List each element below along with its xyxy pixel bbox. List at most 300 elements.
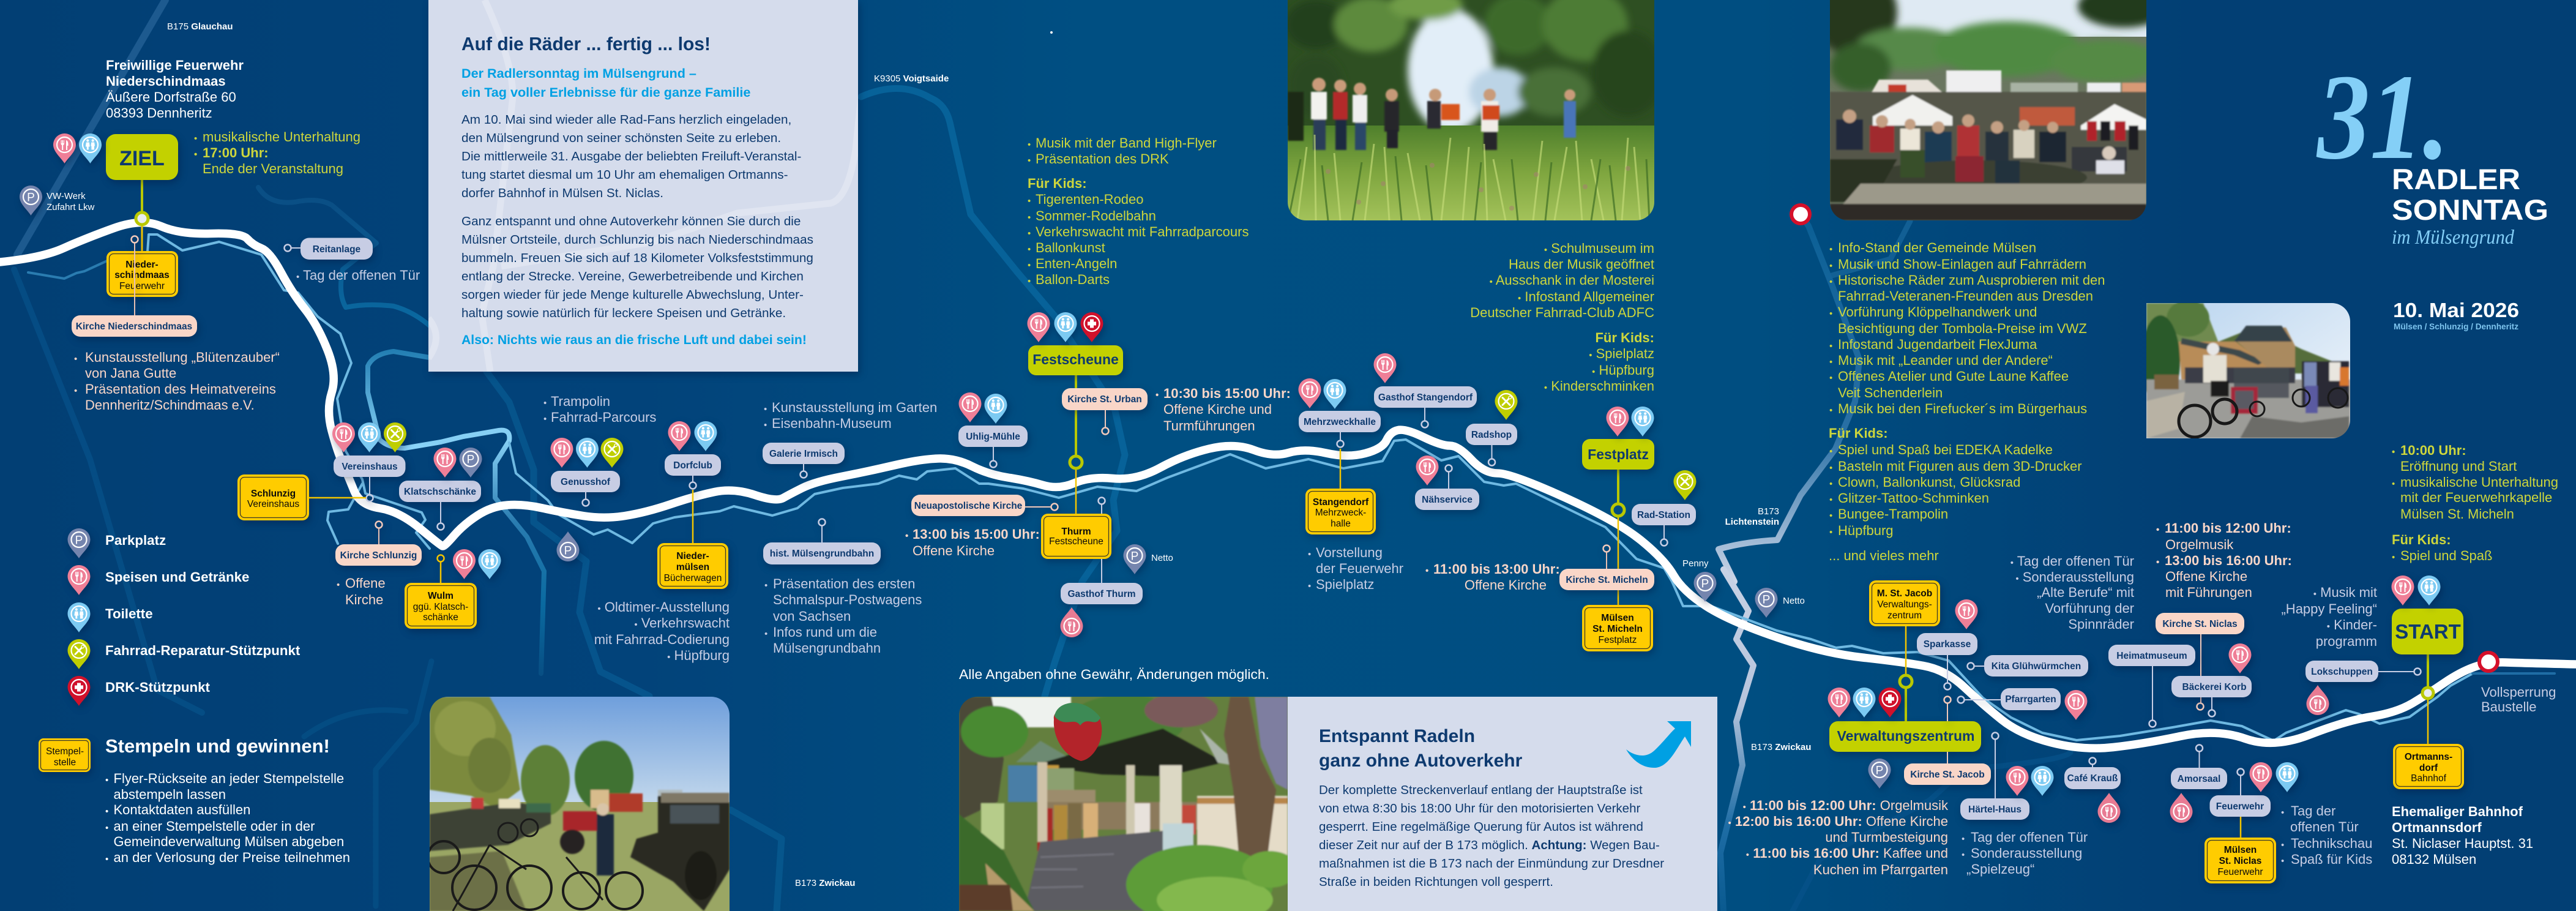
text: Verwaltungszentrum programme: Basteln mit Figuren aus dem 3D-Drucker xyxy=(1838,459,2082,474)
text: Kirche St. Niclas programme: 11:00 bis 12:00 Uhr: xyxy=(2165,520,2291,536)
text: road closure: Vollsperrung xyxy=(2481,684,2556,700)
background road network xyxy=(14,0,2070,911)
photo: festival crowd xyxy=(1830,0,2146,220)
sign: Thurm xyxy=(1041,497,1111,583)
text: Feuerwehr programme xyxy=(2281,803,2372,867)
text: Festscheune programme: Verkehrswacht mit Fahrradparcours xyxy=(1036,224,1249,239)
pins: Mehrzweckhalle xyxy=(1299,378,1346,409)
label: Pfarrgarten: Pfarrgarten xyxy=(2005,694,2056,705)
label: Härtel-Haus: Härtel-Haus xyxy=(1968,804,2022,815)
text: VW-Werk access: Zufahrt Lkw xyxy=(47,202,95,212)
station: Verwaltungszentrum xyxy=(1827,626,1981,752)
text: Kirche St. Niclas programme: • xyxy=(2156,557,2159,568)
sign: Wulm: ggü. Klatsch- xyxy=(413,602,468,612)
text: Kirche St. Micheln programme: 11:00 bis 13:00 Uhr: xyxy=(1433,561,1560,577)
road labels: B173 Zwickau xyxy=(1751,742,1811,752)
text: Festscheune programme: Für Kids: xyxy=(1028,176,1087,191)
text: Stempeln instructions: • xyxy=(105,823,108,833)
text: Neuapostolische Kirche programme: 13:00 bis 15:00 Uhr: xyxy=(913,527,1040,542)
text: Verwaltungszentrum programme: • xyxy=(1829,405,1832,416)
text: START programme: Spiel und Spaß xyxy=(2400,548,2492,563)
text: Reitanlage programme: Tag der offenen Tür xyxy=(303,268,420,283)
icon: food pin Sparkasse xyxy=(1955,599,1978,629)
text: Verwaltungszentrum programme: • xyxy=(1829,373,1832,383)
sign: Thurm: Festscheune xyxy=(1049,536,1103,547)
text: Kirche Schlunzig programme: • xyxy=(337,580,340,590)
label: Bäckerei Korb xyxy=(2171,676,2252,716)
sign: Stangendorf: halle xyxy=(1331,519,1351,529)
pins: Dorfclub xyxy=(668,421,717,451)
text: Galerie Irmisch programme: Eisenbahn-Museum xyxy=(772,416,892,431)
text: Festplatz programme: • Kinderschminken xyxy=(1544,378,1654,394)
sign: Niederschindmaas: Nieder- xyxy=(125,260,159,270)
text: ZIEL programme: • xyxy=(194,149,197,160)
text: Niedermülsen programme: • Hüpfburg xyxy=(667,648,730,663)
text: Feuerwehr programme: Tag der xyxy=(2291,803,2335,819)
text: Niedermülsen programme xyxy=(594,599,730,663)
label: Genusshof xyxy=(551,471,620,506)
text: Lokschuppen programme: „Happy Feeling“ xyxy=(2281,601,2377,617)
sign: Mülsen St. Niclas: St. Niclas xyxy=(2219,856,2261,866)
text: Festplatz programme: Haus der Musik geöffnet xyxy=(1509,257,1654,272)
label: Härtel-Haus xyxy=(1960,732,2029,820)
text: Kirche St. Urban programme xyxy=(1155,386,1291,433)
icon: parking pin Verwaltungszentrum xyxy=(1868,759,1891,789)
text: Verwaltungszentrum programme: ... und vieles mehr xyxy=(1829,548,1939,563)
sign: Ortmannsdorf: Ortmanns- xyxy=(2405,752,2452,762)
sign: Stempelstelle: stelle xyxy=(54,757,76,768)
sign: Niederschindmaas: Feuerwehr xyxy=(119,281,165,291)
label: Radshop: Radshop xyxy=(1471,430,1512,440)
heading: ganz ohne Autoverkehr xyxy=(1319,751,1523,771)
text: Feuerwehr programme: Spaß für Kids xyxy=(2291,852,2372,867)
address: Ehemaliger Bahnhof xyxy=(2392,804,2533,867)
text: Verwaltungszentrum programme: Glitzer-Tattoo-Schminken xyxy=(1838,490,1989,506)
text: Festscheune programme: • xyxy=(1028,212,1031,223)
text: Neuapostolische Kirche programme: • xyxy=(905,531,908,541)
legend: Toilette: Toilette xyxy=(105,606,153,621)
label: Kirche St. Micheln: Kirche St. Micheln xyxy=(1566,575,1648,585)
text: Verwaltungszentrum programme: Vorführung Klöppelhandwerk und xyxy=(1838,304,2037,320)
text: Härtel-Haus programme: Sonderausstellung xyxy=(1971,845,2082,861)
pins: Klatschschänke xyxy=(433,448,482,478)
icon: parking pin Netto 2 xyxy=(1755,588,1777,618)
text: Neuapostolische Kirche programme: Offene Kirche xyxy=(913,543,995,558)
station: Festscheune: Festscheune xyxy=(1032,351,1119,367)
text: Verwaltungszentrum programme: • xyxy=(1829,527,1832,538)
text: Verwaltungszentrum programme xyxy=(1829,240,2105,563)
sign: Stangendorf: Stangendorf xyxy=(1313,497,1369,508)
text: Neuapostolische Kirche programme xyxy=(905,527,1040,558)
icon: food pin Amorsaal xyxy=(2170,793,2192,823)
text: Kirche Niederschindmaas programme: Dennheritz/Schindmaas e.V. xyxy=(85,397,255,413)
icon: food pin Nähservice xyxy=(1416,455,1438,485)
sign: Schlunzig: Vereinshaus xyxy=(247,499,299,509)
title: 31. Radler Sonntag: im Mülsengrund xyxy=(2392,227,2514,249)
pins: Feuerwehr xyxy=(2250,762,2299,792)
label: hist. Mülsengrundbahn: hist. Mülsengrundbahn xyxy=(770,549,874,559)
icon: arrow xyxy=(1626,721,1691,768)
text: Lokschuppen programme: • Musik mit xyxy=(2313,585,2377,600)
text: Kirche Schlunzig programme: Offene xyxy=(345,575,386,591)
title: 31. Radler Sonntag: SONNTAG xyxy=(2392,193,2548,226)
heading xyxy=(1319,726,1523,771)
road labels xyxy=(167,21,1811,888)
text: Kirche St. Jacob programme: • 12:00 bis 16:00 Uhr: Offene Kirche xyxy=(1728,814,1948,829)
title: 31. Radler Sonntag: 31. xyxy=(2316,50,2449,185)
photo: cyclists at old station xyxy=(2141,300,2350,438)
main route xyxy=(0,223,2576,748)
address: Feuerwehr Niederschindmaas: 08393 Dennheritz xyxy=(106,105,212,121)
text: Kirche Schlunzig programme xyxy=(337,575,386,607)
station: Festplatz xyxy=(1582,407,1654,605)
text: Niedermülsen programme: • Verkehrswacht xyxy=(634,615,730,631)
body text: Mülsner Ortsteile, durch Schlunzig bis nach Niederschindmaas xyxy=(461,233,813,247)
sign: Mülsen St. Micheln: St. Micheln xyxy=(1592,624,1643,634)
icon: food pin Pfarrgarten xyxy=(2065,690,2087,720)
text: Festscheune programme: • xyxy=(1028,260,1031,271)
label: Reitanlage: Reitanlage xyxy=(313,244,361,255)
text: Kirche St. Jacob programme xyxy=(1728,798,1949,877)
pins: Wulm xyxy=(453,549,501,579)
text: Mülsengrundbahn programme: • xyxy=(764,580,767,591)
text: Festscheune programme: • xyxy=(1028,140,1031,150)
title: 31. Radler Sonntag xyxy=(2316,50,2548,249)
text: Kirche St. Urban programme: • xyxy=(1155,390,1159,400)
text: ZIEL programme xyxy=(194,129,360,176)
pins: Vereinshaus xyxy=(332,422,406,452)
label: Kirche Schlunzig: Kirche Schlunzig xyxy=(340,550,417,561)
text: ZIEL programme: musikalische Unterhaltung xyxy=(203,129,360,144)
text: Kirche Schlunzig programme: Kirche xyxy=(345,592,383,607)
address: Feuerwehr Niederschindmaas: Äußere Dorfstraße 60 xyxy=(106,89,236,105)
label: Kirche St. Jacob xyxy=(1904,697,1991,785)
text: Verwaltungszentrum programme: Musik mit „Leander und der Andere“ xyxy=(1838,353,2053,368)
body text: maßnahmen ist die B 173 nach der Einmündung zur Dresdner xyxy=(1319,857,1664,871)
text: Verwaltungszentrum programme: • xyxy=(1829,463,1832,473)
text: Feuerwehr programme: Technikschau xyxy=(2291,836,2372,851)
text: Verwaltungszentrum programme: Hüpfburg xyxy=(1838,523,1894,538)
closing line: Also: Nichts wie raus an die frische Luft und dabei sein! xyxy=(461,333,807,347)
text: Härtel-Haus programme: • xyxy=(1962,834,1965,844)
text: Festplatz programme: • Schulmuseum im xyxy=(1544,241,1654,256)
label: Klatschschänke: Klatschschänke xyxy=(404,487,476,497)
legend: Parkplatz: Parkplatz xyxy=(105,533,166,548)
text: Kirche St. Urban programme: Turmführungen xyxy=(1163,418,1255,433)
text: Feuerwehr programme: offenen Tür xyxy=(2290,819,2359,834)
text: Verwaltungszentrum programme: • xyxy=(1829,479,1832,489)
label: Rad-Station: Rad-Station xyxy=(1637,510,1690,520)
text: Härtel-Haus programme xyxy=(1962,830,2088,877)
label: Feuerwehr: Feuerwehr xyxy=(2216,801,2264,812)
label: Dorfclub: Dorfclub xyxy=(673,460,712,471)
text: Verwaltungszentrum programme: • xyxy=(1829,446,1832,457)
text: Festscheune programme: Enten-Angeln xyxy=(1036,256,1117,271)
sign: Wulm xyxy=(405,555,477,629)
sign: Wulm: schänke xyxy=(423,612,458,623)
text: ZIEL programme: 17:00 Uhr: xyxy=(203,145,269,160)
text: Feuerwehr programme: • xyxy=(2281,808,2284,818)
icon: food pin Café Krauß xyxy=(2098,793,2120,823)
sign: Ortmannsdorf: Bahnhof xyxy=(2411,773,2447,784)
legend: DRK: DRK-Stützpunkt xyxy=(105,680,210,695)
sign: Stempelstelle: Stempel- xyxy=(46,746,84,757)
body text: Am 10. Mai sind wieder alle Rad-Fans herzlich eingeladen, xyxy=(461,113,791,127)
body text: den Mülsengrund von seiner schönsten Seite zu erleben. xyxy=(461,131,781,145)
text: Härtel-Haus programme: Tag der offenen Tür xyxy=(1971,830,2088,845)
text: Stempeln instructions xyxy=(105,771,350,865)
text: Härtel-Haus programme: „Spielzeug“ xyxy=(1966,861,2034,877)
text: road closure xyxy=(2481,684,2556,714)
body text: Straße in beiden Richtungen voll gesperrt. xyxy=(1319,875,1553,889)
text: Genusshof programme: • xyxy=(543,414,547,424)
sign: Thurm: Thurm xyxy=(1061,527,1091,537)
sign: Mülsen St. Niclas: Mülsen xyxy=(2224,845,2257,855)
sign: Mülsen St. Niclas xyxy=(2205,838,2276,883)
text: Genusshof programme: • xyxy=(543,398,547,408)
text: START programme: • xyxy=(2392,479,2395,489)
road labels: K9305 Voigtsaide xyxy=(874,73,949,84)
sign: M. St. Jacob xyxy=(1869,580,1940,626)
label: Radshop xyxy=(1466,424,1517,465)
text: Kirche Niederschindmaas programme: Kunstausstellung „Blütenzauber“ xyxy=(85,350,280,365)
sign: Niederschindmaas xyxy=(106,251,178,297)
legend: Parkplatz xyxy=(67,528,166,558)
station: Verwaltungszentrum: Verwaltungszentrum xyxy=(1837,728,1974,744)
panel: intro text xyxy=(428,0,861,372)
text: Kirche St. Jacob programme: und Turmbesteigung xyxy=(1825,830,1948,845)
text: Pfarrgarten/Heimatmuseum programme: • Tag der offenen Tür xyxy=(2010,553,2134,569)
body text: dorfer Bahnhof in Mülsen St. Niclas. xyxy=(461,186,663,200)
address: Feuerwehr Niederschindmaas: Niederschindmaas xyxy=(106,73,226,89)
road labels: Lichtenstein xyxy=(1725,517,1779,527)
text: Festplatz programme: • Spielplatz xyxy=(1589,346,1654,361)
body text xyxy=(461,113,813,320)
text: Verwaltungszentrum programme: Musik bei den Firefucker´s im Bürgerhaus xyxy=(1838,401,2087,416)
sign: Mülsen St. Micheln: Festplatz xyxy=(1599,635,1637,645)
text: Pfarrgarten/Heimatmuseum programme: Spinnräder xyxy=(2068,617,2134,632)
legend: Fahrrad-Reparatur: Fahrrad-Reparatur-Stützpunkt xyxy=(105,643,301,658)
label: Sparkasse: Sparkasse xyxy=(1924,639,1971,650)
subheading xyxy=(461,66,750,100)
text: Galerie Irmisch programme: • xyxy=(764,420,767,430)
text: Penny: Penny xyxy=(1682,558,1709,569)
label: hist. Mülsengrundbahn xyxy=(763,519,881,564)
text: Verwaltungszentrum programme: Clown, Ballonkunst, Glücksrad xyxy=(1838,474,2020,490)
text: Verwaltungszentrum programme: Info-Stand der Gemeinde Mülsen xyxy=(1838,240,2036,255)
text: Verwaltungszentrum programme: • xyxy=(1829,244,1832,255)
sign: M. St. Jacob: Verwaltungs- xyxy=(1877,599,1932,610)
label: Neuapostolische Kirche: Neuapostolische Kirche xyxy=(914,501,1023,511)
text: Galerie Irmisch programme: Kunstausstellung im Garten xyxy=(772,400,937,415)
text: Festscheune programme: Präsentation des DRK xyxy=(1036,151,1169,167)
icon: parking pin xyxy=(557,531,579,561)
text: START programme: 10:00 Uhr: xyxy=(2400,443,2466,458)
text: Kirche St. Jacob programme: Kuchen im Pfarrgarten xyxy=(1813,862,1948,877)
heading: Stempeln und gewinnen: Stempeln und gewinnen! xyxy=(105,735,330,757)
label: Dorfclub xyxy=(665,454,721,489)
sign: Niedermülsen: Bücherwagen xyxy=(664,573,722,583)
label: Genusshof: Genusshof xyxy=(561,477,611,487)
text: Verwaltungszentrum programme: Fahrrad-Veteranen-Freunden aus Dresden xyxy=(1838,288,2093,304)
text: Stempeln instructions: Gemeindeverwaltung Mülsen abgeben xyxy=(114,834,344,849)
legend: Fahrrad-Reparatur xyxy=(67,639,301,669)
label: Kirche St. Niclas xyxy=(2156,613,2244,710)
text: Kirche St. Niclas programme: Offene Kirche xyxy=(2165,569,2247,584)
panel: traffic notice xyxy=(1288,697,1717,911)
body text: bummeln. Freuen Sie sich auf 18 Kilometer Volksfeststimmung xyxy=(461,251,813,265)
icon: food pin Lokschuppen xyxy=(2306,685,2329,715)
date: 10. Mai 2026 xyxy=(2393,299,2519,321)
body text xyxy=(1319,783,1664,889)
text: Pfarrgarten/Heimatmuseum programme: • Sonderausstellung xyxy=(2015,569,2134,585)
text: Stangendorf programme: Spielplatz xyxy=(1316,577,1374,592)
body text: Ganz entspannt und ohne Autoverkehr können Sie durch die xyxy=(461,214,801,228)
body text: entlang der Strecke. Vereine, Gewerbetreibende und Kirchen xyxy=(461,269,804,283)
text: Kirche St. Urban programme: 10:30 bis 15:00 Uhr: xyxy=(1163,386,1291,401)
subheading: ein Tag voller Erlebnisse für die ganze Familie xyxy=(461,84,750,100)
text: START programme: • xyxy=(2392,552,2395,563)
label: Amorsaal xyxy=(2171,744,2227,789)
text: Mülsengrundbahn programme: von Sachsen xyxy=(773,609,851,624)
sign: Wulm: Wulm xyxy=(428,591,454,601)
text: Niedermülsen programme: mit Fahrrad-Codierung xyxy=(594,632,730,647)
text: Mülsengrundbahn programme: Präsentation des ersten xyxy=(773,576,915,591)
station: ZIEL xyxy=(53,133,178,251)
label: Sparkasse xyxy=(1917,633,1977,689)
label: Rad-Station xyxy=(1632,504,1696,546)
legend: Speisen und Getränke xyxy=(67,565,249,595)
photo: art market with strawberry xyxy=(959,693,1297,911)
icon: parking pin Penny xyxy=(1694,572,1716,602)
text: START programme xyxy=(2392,443,2558,563)
text: Stangendorf programme: • xyxy=(1308,549,1311,560)
sign: Mülsen St. Niclas: Feuerwehr xyxy=(2217,867,2263,877)
label: Kirche Niederschindmaas: Kirche Niederschindmaas xyxy=(76,321,192,332)
text: Härtel-Haus programme: • xyxy=(1962,850,1965,860)
text: Lokschuppen programme: programm xyxy=(2316,634,2377,649)
sign: Niedermülsen: mülsen xyxy=(676,562,709,572)
sign: Ortmannsdorf: dorf xyxy=(2419,763,2438,773)
address: Ehemaliger Bahnhof: Ehemaliger Bahnhof xyxy=(2392,804,2523,819)
text: Verwaltungszentrum programme: Veit Schenderlein xyxy=(1838,385,1943,400)
text: START programme: Für Kids: xyxy=(2392,532,2451,547)
label: Mehrzweckhalle: Mehrzweckhalle xyxy=(1304,417,1376,427)
body text: tung startet diesmal um 10 Uhr am ehemaligen Ortmanns- xyxy=(461,168,788,182)
label: Café Krauß xyxy=(2064,758,2121,789)
text: Verwaltungszentrum programme: Historische Räder zum Ausprobieren mit den xyxy=(1838,272,2105,288)
address: Ehemaliger Bahnhof: St. Niclaser Hauptst. 31 xyxy=(2392,836,2533,851)
text: Festplatz programme xyxy=(1470,241,1654,394)
station: Festplatz: Festplatz xyxy=(1588,446,1649,462)
label: Galerie Irmisch xyxy=(763,443,845,478)
text: Festscheune programme: • xyxy=(1028,156,1031,166)
station: START xyxy=(2392,575,2463,744)
label: Heimatmuseum xyxy=(2108,645,2195,727)
icon: repair pin Radshop xyxy=(1495,390,1518,420)
text: Genusshof programme: Fahrrad-Parcours xyxy=(551,410,656,425)
sign: Schlunzig xyxy=(237,474,366,520)
text: Reitanlage programme: • xyxy=(296,272,299,282)
text: ZIEL programme: Ende der Veranstaltung xyxy=(203,161,343,176)
sign: Schlunzig: Schlunzig xyxy=(251,489,296,499)
text: Festscheune programme: • xyxy=(1028,196,1031,206)
photo: brass band in meadow xyxy=(1285,0,1665,220)
sign: M. St. Jacob: M. St. Jacob xyxy=(1877,588,1932,599)
text: Kirche Niederschindmaas programme: • xyxy=(74,354,77,364)
pins: Härtel-Haus xyxy=(2006,766,2054,796)
text: Kirche St. Niclas programme: mit Führungen xyxy=(2165,585,2252,600)
text: Kirche Niederschindmaas programme xyxy=(74,350,280,413)
text: Festplatz programme: Deutscher Fahrrad-Club ADFC xyxy=(1470,305,1654,320)
label: Feuerwehr xyxy=(2209,769,2271,838)
text: Verwaltungszentrum programme: Offenes Atelier und Gute Laune Kaffee xyxy=(1838,369,2069,384)
text: Galerie Irmisch programme xyxy=(764,400,937,431)
text: Verwaltungszentrum programme: • xyxy=(1829,511,1832,521)
label: Galerie Irmisch: Galerie Irmisch xyxy=(769,449,838,459)
text: Niedermülsen programme: • Oldtimer-Ausstellung xyxy=(597,599,730,615)
text: Feuerwehr programme: • xyxy=(2281,840,2284,850)
icon: repair pin Rad-Station xyxy=(1673,470,1697,500)
text: Kirche St. Niclas programme: Orgelmusik xyxy=(2165,537,2234,552)
text: Kirche Niederschindmaas programme: Präsentation des Heimatvereins xyxy=(85,381,276,397)
road labels: B173 Zwickau xyxy=(795,878,855,888)
text: Kirche Niederschindmaas programme: von Jana Gutte xyxy=(85,366,176,381)
text: Mülsengrundbahn programme: • xyxy=(764,629,767,639)
station: START: START xyxy=(2395,620,2461,643)
body text: Die mittlerweile 31. Ausgabe der beliebten Freiluft-Veranstal- xyxy=(461,149,801,163)
text: Genusshof programme: Trampolin xyxy=(551,394,610,409)
label: Bäckerei Korb: Bäckerei Korb xyxy=(2182,682,2247,692)
label: Kirche Schlunzig xyxy=(335,522,422,566)
label: Klatschschänke xyxy=(399,481,481,530)
text: Verwaltungszentrum programme: Infostand Jugendarbeit FlexJuma xyxy=(1838,337,2037,352)
text: Verwaltungszentrum programme: Musik und Show-Einlagen auf Fahrrädern xyxy=(1838,257,2086,272)
sign: Niederschindmaas: schindmaas xyxy=(114,270,170,280)
label: Kita Glühwürmchen: Kita Glühwürmchen xyxy=(1992,661,2081,672)
text: Verwaltungszentrum programme: • xyxy=(1829,341,1832,351)
label: Lokschuppen xyxy=(2305,661,2421,682)
text: Verwaltungszentrum programme: Für Kids: xyxy=(1829,426,1888,441)
body text: von etwa 8:30 bis 18:00 Uhr für den motorisierten Verkehr xyxy=(1319,801,1640,815)
subheading: Der Radlersonntag im Mülsengrund – xyxy=(461,66,696,81)
legend xyxy=(67,528,301,706)
sign: Stangendorf: Mehrzweck- xyxy=(1315,508,1366,518)
label: Kirche St. Urban xyxy=(1062,388,1148,435)
legend: DRK xyxy=(67,676,210,706)
sign: Mülsen St. Micheln xyxy=(1582,605,1653,651)
text: Mülsengrundbahn programme: Mülsengrundbahn xyxy=(773,640,881,656)
sign: M. St. Jacob: zentrum xyxy=(1887,610,1922,621)
text: Stangendorf programme: Vorstellung xyxy=(1316,545,1383,560)
text: START programme: Eröffnung und Start xyxy=(2400,459,2517,474)
legend: Toilette xyxy=(67,602,153,632)
label: Kirche St. Jacob: Kirche St. Jacob xyxy=(1910,770,1985,780)
label: Kirche St. Niclas: Kirche St. Niclas xyxy=(2162,619,2238,629)
pins: Uhlig-Mühle xyxy=(958,392,1007,424)
icon: parking pin VW-Werk xyxy=(20,186,42,216)
text: Verwaltungszentrum programme: • xyxy=(1829,309,1832,319)
label: Kita Glühwürmchen xyxy=(1967,655,2088,677)
road labels: B175 Glauchau xyxy=(167,21,233,32)
text: Kirche St. Micheln programme: Offene Kirche xyxy=(1465,577,1547,593)
text: Galerie Irmisch programme: • xyxy=(764,404,767,414)
text: Festplatz programme: • Infostand Allgemeiner xyxy=(1518,289,1654,304)
icon: food pin Gasthof Stangendorf xyxy=(1373,353,1397,383)
text: Mülsengrundbahn programme xyxy=(764,576,922,656)
title: 31. Radler Sonntag: RADLER xyxy=(2392,163,2520,195)
river xyxy=(28,234,2555,741)
